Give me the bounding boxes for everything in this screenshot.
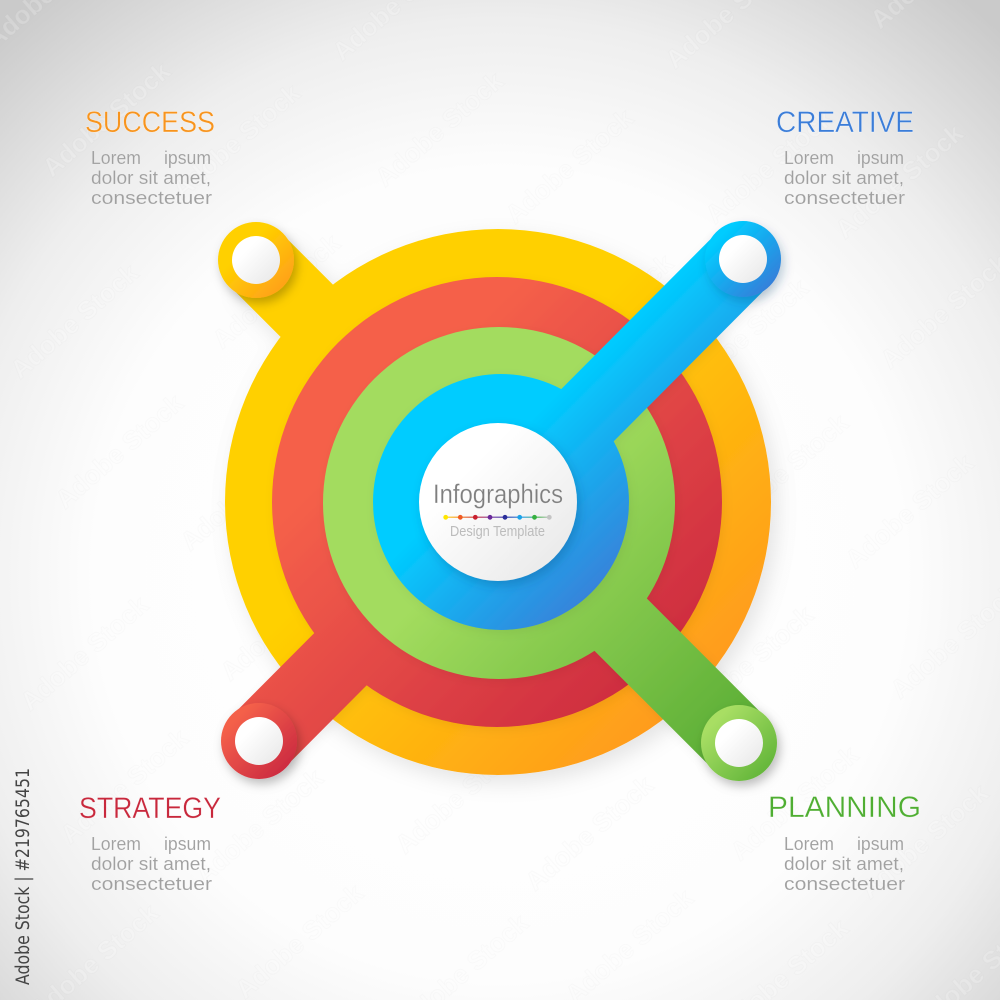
text block: success (91, 148, 212, 208)
watermark pattern: Adobe Stock (679, 599, 819, 727)
text block: creative: ipsum (857, 148, 904, 168)
watermark pattern: Adobe Stock (699, 102, 839, 230)
text block: creative: dolor sit amet, (784, 168, 904, 188)
knob: planning (701, 705, 777, 781)
text block: success: ipsum (164, 148, 211, 168)
watermark pattern: Adobe Stock (724, 739, 864, 867)
stock id credit: Adobe Stock | #219765451 (13, 768, 34, 985)
red ring with arm toward Strategy (259, 277, 722, 741)
text block: creative: Lorem (784, 148, 834, 168)
text block: strategy (91, 834, 212, 894)
watermark pattern: Adobe Stock (54, 722, 194, 850)
colored dot line (443, 515, 552, 520)
watermark pattern: Adobe Stock (189, 762, 329, 890)
green ring with arm toward Planning (323, 327, 739, 743)
watermark pattern: Adobe Stock (714, 407, 854, 535)
blue ring with arm toward Creative (373, 259, 743, 630)
watermark pattern: Adobe Stock (36, 55, 176, 183)
watermark pattern: Adobe Stock (4, 257, 144, 385)
watermark pattern: Adobe Stock (14, 589, 154, 717)
knob: strategy (221, 703, 297, 779)
watermark pattern: Adobe Stock (174, 429, 314, 557)
text block: success: Lorem (91, 148, 141, 168)
watermark pattern: Adobe Stock (389, 732, 529, 860)
text block: creative (784, 148, 905, 208)
text block: planning: consectetuer (784, 874, 905, 894)
center circle with title (419, 423, 577, 581)
watermark pattern: Adobe Stock (166, 77, 306, 205)
watermark pattern: Adobe Stock (344, 602, 484, 730)
center subtitle: Design Template (450, 524, 545, 540)
watermark pattern: Adobe Stock (539, 247, 679, 375)
watermark pattern: Adobe Stock (499, 102, 639, 230)
center title: Infographics (433, 479, 563, 509)
heading: strategy: STRATEGY (79, 792, 221, 825)
watermark pattern: Adobe Stock (49, 387, 189, 515)
knob: creative (705, 221, 781, 297)
text block: strategy: Lorem (91, 834, 141, 854)
heading: planning: PLANNING (768, 791, 921, 824)
yellow ring with arm toward Success (225, 229, 771, 775)
heading: creative: CREATIVE (776, 106, 914, 139)
watermark pattern: Adobe Stock (379, 402, 519, 530)
watermark pattern: Adobe Stock (369, 65, 509, 193)
watermark pattern: Adobe Stock (214, 559, 354, 687)
text block: strategy: consectetuer (91, 874, 212, 894)
watermark pattern: Adobe Stock (854, 777, 994, 905)
text block: success: consectetuer (91, 188, 212, 208)
text block: planning: ipsum (857, 834, 904, 854)
watermark pattern: Adobe Stock (839, 447, 979, 575)
text block: planning: Lorem (784, 834, 834, 854)
heading: success: SUCCESS (85, 106, 215, 139)
text block: success: dolor sit amet, (91, 168, 211, 188)
watermark pattern: Adobe Stock (519, 769, 659, 897)
text block: strategy: ipsum (164, 834, 211, 854)
text block: planning (784, 834, 905, 894)
watermark pattern: Adobe Stock (829, 117, 969, 245)
knob: success (218, 222, 294, 298)
text block: strategy: dolor sit amet, (91, 854, 211, 874)
watermark pattern: Adobe Stock (334, 267, 474, 395)
watermark pattern: Adobe Stock (549, 569, 689, 697)
text block: planning: dolor sit amet, (784, 854, 904, 874)
watermark pattern: Adobe Stock (674, 272, 814, 400)
watermark pattern: Adobe Stock (206, 227, 346, 355)
text block: creative: consectetuer (784, 188, 905, 208)
